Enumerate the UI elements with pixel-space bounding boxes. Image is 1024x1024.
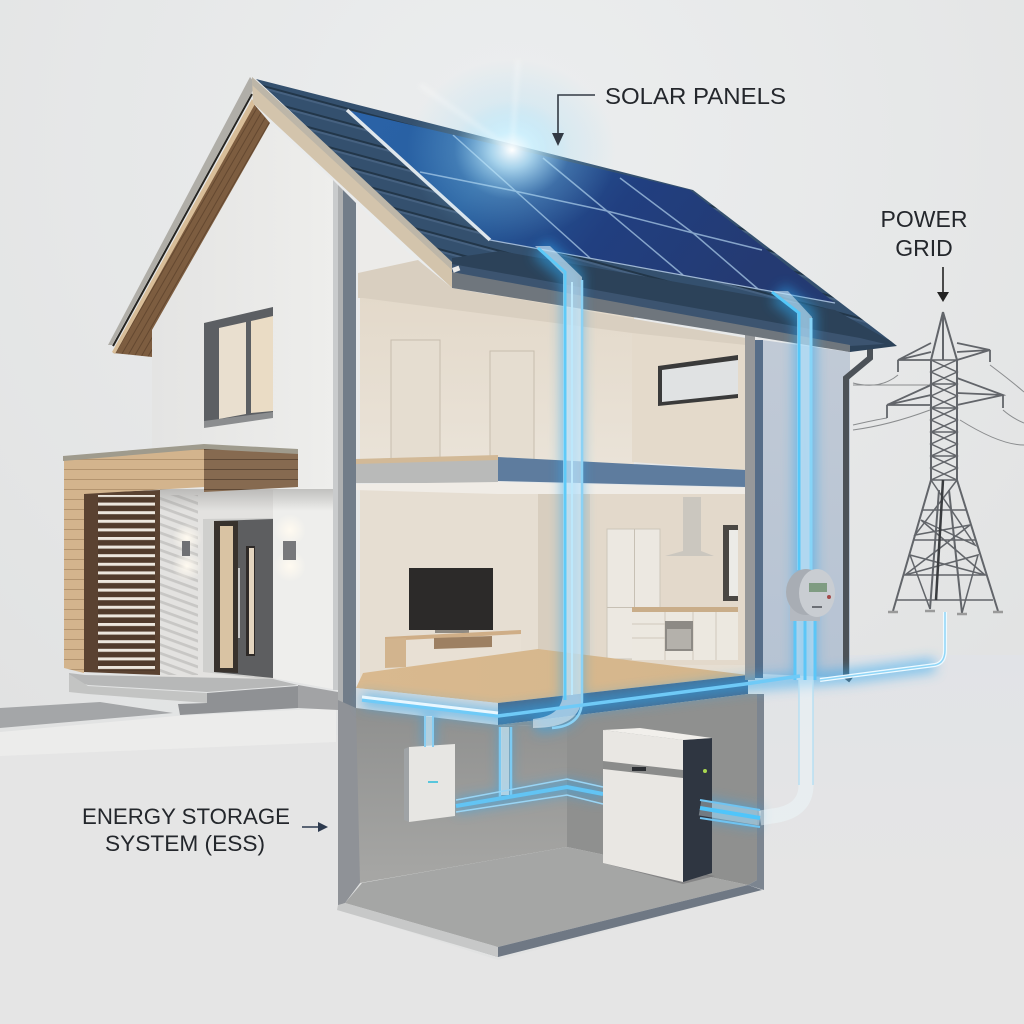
gutter end xyxy=(452,266,460,273)
label: power grid: GRID xyxy=(895,235,953,261)
mid floor slab xyxy=(355,455,746,494)
lower room xyxy=(360,488,748,683)
canopy shadow xyxy=(160,489,338,511)
slab right face xyxy=(498,675,748,725)
arrow: solar panels xyxy=(552,95,595,146)
cross arms xyxy=(887,343,1003,418)
recess wall xyxy=(158,490,276,680)
upper room xyxy=(358,260,746,470)
exterior wall xyxy=(152,123,338,690)
pipes: wires to inverter xyxy=(425,716,603,812)
eave bands xyxy=(452,251,897,352)
display xyxy=(632,767,646,771)
meter down pipes xyxy=(794,620,816,680)
solar right pipe xyxy=(770,291,812,570)
grid line xyxy=(820,612,945,680)
solar left pipe xyxy=(533,246,582,728)
canopy cap xyxy=(63,444,298,461)
back wall xyxy=(360,295,634,465)
steps xyxy=(69,673,298,692)
slat screen xyxy=(84,490,160,675)
canopy front xyxy=(64,447,204,496)
roof xyxy=(252,77,897,352)
right back wall xyxy=(498,694,757,885)
black line xyxy=(113,94,252,346)
wall lamps xyxy=(172,523,202,553)
arrow: power grid xyxy=(937,267,949,302)
right wall xyxy=(632,330,746,470)
roof plane xyxy=(256,79,892,344)
tan stripe xyxy=(112,99,255,354)
electric meter xyxy=(786,569,835,621)
label: solar panels: SOLAR PANELS xyxy=(605,83,786,109)
wood soffit xyxy=(113,103,270,357)
panel frame xyxy=(347,110,490,240)
battery shadow xyxy=(603,863,715,884)
power grid tower xyxy=(853,312,1024,614)
green led xyxy=(703,769,707,773)
gable soffit and barge board xyxy=(108,77,270,357)
battery to wall xyxy=(700,808,760,818)
column xyxy=(745,335,755,680)
kitchen hood xyxy=(665,497,714,556)
barge board xyxy=(252,77,452,288)
porch xyxy=(63,444,338,715)
solar panels xyxy=(347,60,835,303)
floor edge xyxy=(337,885,762,957)
left wall cut xyxy=(338,700,360,905)
white wall above ceiling xyxy=(358,205,418,275)
ceiling xyxy=(358,260,746,345)
sun glare xyxy=(407,60,617,240)
grey band xyxy=(603,761,683,778)
battery ESS unit xyxy=(603,728,715,884)
left back wall xyxy=(356,708,567,883)
doors xyxy=(391,340,440,460)
downspout xyxy=(846,348,870,680)
door xyxy=(214,519,273,678)
tv stand xyxy=(385,632,521,668)
ground floor wood xyxy=(356,649,748,725)
battery top xyxy=(603,728,712,740)
floor xyxy=(345,847,748,947)
label: energy storage system: ENERGY STORAGE xyxy=(82,804,290,829)
footings xyxy=(888,611,1003,614)
label: power grid xyxy=(881,206,967,302)
label: power grid: POWER xyxy=(881,206,967,232)
tower body xyxy=(893,312,998,613)
right exterior wall xyxy=(745,335,870,680)
door frame recess xyxy=(203,518,273,680)
counter xyxy=(632,607,738,612)
oven xyxy=(665,621,693,651)
slat shadows xyxy=(160,495,198,675)
tan column xyxy=(64,460,84,673)
energy pipes glow xyxy=(362,248,935,818)
slab left face xyxy=(356,688,498,725)
right wall cut xyxy=(748,694,764,890)
panel grid xyxy=(420,135,762,289)
battery side xyxy=(683,738,712,882)
clerestory window xyxy=(658,355,738,406)
wires xyxy=(853,365,1024,445)
fridge xyxy=(607,529,660,659)
main energy pipes xyxy=(362,246,945,827)
left cut wall xyxy=(333,180,356,905)
label: energy storage system: SYSTEM (ESS) xyxy=(105,831,265,856)
down to battery xyxy=(760,680,806,818)
lower cabinets xyxy=(632,612,738,660)
arrow: energy storage xyxy=(302,822,328,832)
basement xyxy=(337,694,764,957)
label: energy storage system xyxy=(82,804,328,856)
tv xyxy=(409,568,493,630)
grey edge xyxy=(108,77,256,345)
inverter xyxy=(404,744,455,822)
canopy side xyxy=(204,447,298,492)
small window xyxy=(723,525,738,601)
ground and path xyxy=(0,655,1024,1024)
floor line xyxy=(362,676,800,716)
wall right of door xyxy=(273,486,338,690)
battery front xyxy=(603,730,683,882)
label: solar panels xyxy=(552,83,786,146)
upper window xyxy=(204,307,273,428)
